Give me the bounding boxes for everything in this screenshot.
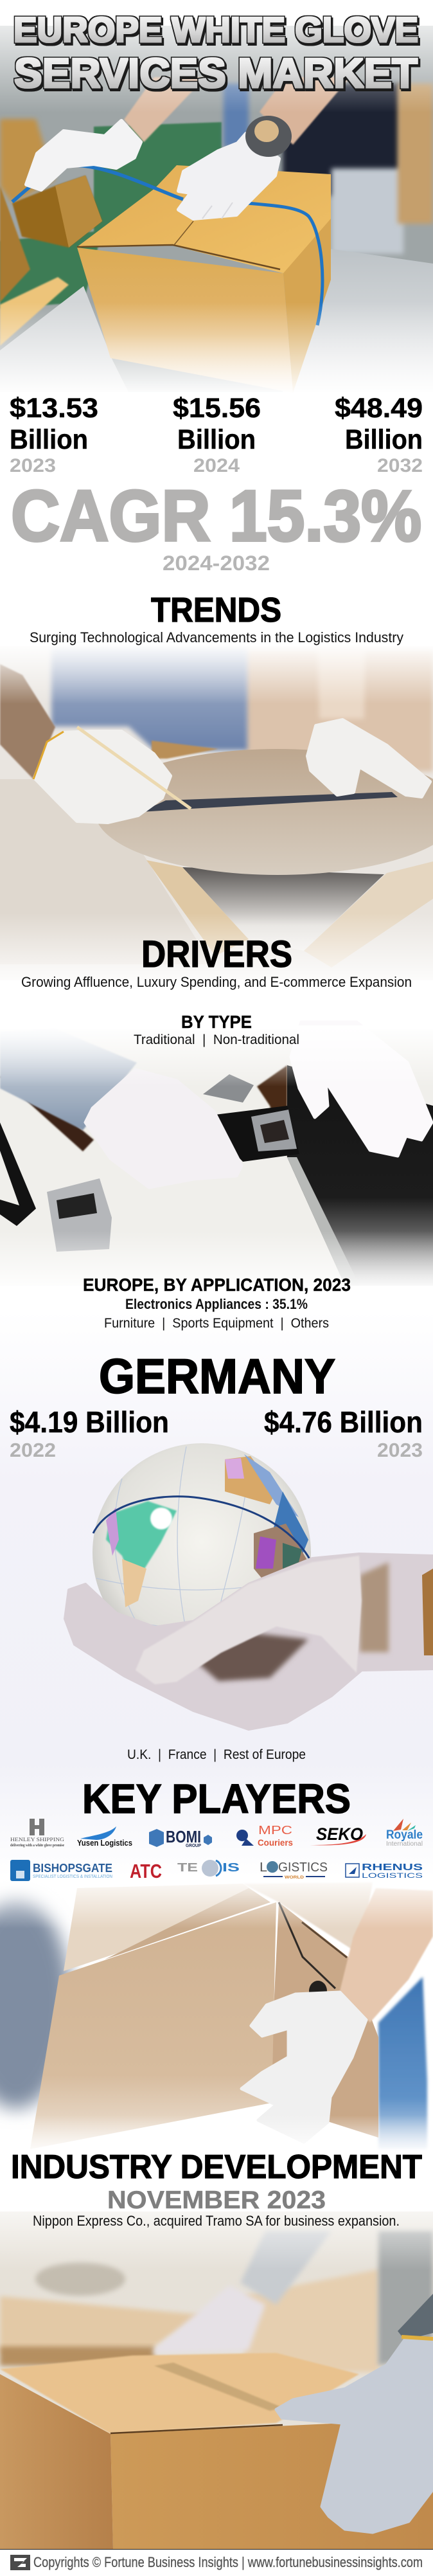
footer: [0, 2549, 433, 2576]
logo: Bishopsgate: BISHOPSGATE: [33, 1862, 112, 1875]
title: SERVICES MARKET: [14, 50, 418, 96]
by type heading: BY TYPE: [181, 1012, 252, 1032]
photo: gloved hands measuring with a ruler on a round table: [0, 646, 433, 980]
drivers text: Growing Affluence, Luxury Spending, and E-commerce Expansion: [21, 974, 412, 990]
photo fade: bottom: [0, 1231, 433, 1292]
germany 2022 value: $4.19 Billion: [10, 1405, 169, 1439]
logo: BOMI Group: GROUP: [186, 1844, 201, 1848]
logo: Tecois: IS: [222, 1861, 240, 1874]
title: [13, 10, 418, 96]
leading application share: Electronics Appliances : 35.1%: [125, 1296, 308, 1312]
title: EUROPE WHITE GLOVE: [13, 10, 418, 50]
heading: industry development: INDUSTRY DEVELOPMENT: [11, 2148, 422, 2186]
logo: Yusen Logistics: Yusen Logistics: [77, 1838, 132, 1848]
logo: MPC Couriers: [236, 1824, 293, 1848]
heading: trends: TRENDS: [151, 591, 281, 629]
logo: Logistics World: L: [260, 1860, 267, 1875]
logo: Royale International: Royale: [386, 1828, 423, 1842]
stat: 2024 market value: [173, 393, 261, 476]
photo fade: top: [0, 2186, 433, 2269]
heading: germany: GERMANY: [99, 1349, 335, 1404]
germany 2022 value: 2022: [10, 1439, 56, 1461]
photo fade: bottom: [0, 302, 433, 395]
logo: BOMI Group: [149, 1827, 212, 1848]
logo: Rhenus Logistics: LOGISTICS: [362, 1872, 423, 1880]
photo: gloved hands handling photographic film slides: [0, 1022, 433, 1286]
photo fade: top: [0, 1025, 433, 1086]
germany 2022 value: [10, 1405, 169, 1461]
other regions: U.K. | France | Rest of Europe: [127, 1747, 306, 1762]
development date: NOVEMBER 2023: [107, 2186, 326, 2214]
logo: Henley Shipping: [10, 1819, 64, 1848]
logo: MPC Couriers: MPC: [258, 1824, 292, 1837]
photo fade: bottom: [0, 2115, 433, 2157]
CAGR period: 2024-2032: [163, 552, 270, 575]
germany 2023 value: [264, 1405, 423, 1461]
heading: key players: KEY PLAYERS: [82, 1776, 351, 1822]
photo: gloved hand carrying a cardboard box: [0, 1882, 433, 2149]
logo: Rhenus Logistics: RHENUS: [362, 1862, 423, 1873]
stat: 2024 market value: Billion: [177, 424, 256, 455]
other applications: Furniture | Sports Equipment | Others: [104, 1316, 329, 1331]
stat: 2024 market value: $15.56: [173, 393, 261, 424]
logo: Logistics World: [260, 1860, 328, 1880]
stat: 2032 market value: $48.49: [335, 393, 423, 424]
germany 2023 value: 2023: [377, 1439, 423, 1461]
logo: MPC Couriers: Couriers: [258, 1837, 293, 1848]
logo: Royale International: [386, 1819, 423, 1848]
logo: Henley Shipping: HENLEY SHIPPING: [10, 1837, 64, 1842]
logo: ATC: ATC: [130, 1860, 162, 1882]
photo fade: bottom: [0, 913, 433, 990]
stat: 2023 market value: [10, 393, 98, 476]
photo: gloved hands strapping a cardboard box: [0, 26, 433, 393]
stat: 2032 market value: [335, 393, 423, 476]
development text: Nippon Express Co., acquired Tramo SA for business expansion.: [33, 2213, 400, 2229]
photo fade: top: [0, 0, 433, 113]
stat: 2023 market value: $13.53: [10, 393, 98, 424]
trends text: Surging Technological Advancements in the Logistics Industry: [30, 629, 403, 645]
logo: Henley Shipping: delivering with a white glove promise: [10, 1844, 64, 1848]
icon: brand logo: [10, 2555, 30, 2570]
heading: drivers: DRIVERS: [141, 933, 292, 975]
stat: 2023 market value: Billion: [10, 424, 88, 455]
logo: Bishopsgate: [10, 1860, 112, 1881]
logo: Rhenus Logistics: [346, 1862, 423, 1880]
stat: 2024 market value: 2024: [193, 455, 240, 476]
photo fade: top: [0, 1874, 433, 1929]
logo: Logistics World: GISTICS: [278, 1860, 328, 1875]
logo: Yusen Logistics: [77, 1826, 132, 1848]
logo: Bishopsgate: SPECIALIST LOGISTICS & INSTALLATION: [33, 1875, 112, 1879]
application heading: EUROPE, BY APPLICATION, 2023: [83, 1275, 351, 1295]
by type segments: Traditional | Non-traditional: [134, 1032, 299, 1047]
photo: gloved hands sealing a large cardboard box: [0, 2211, 433, 2549]
logo: BOMI Group: BOMI: [166, 1827, 201, 1846]
logo: SEKO: SEKO: [316, 1824, 363, 1844]
photo fade: top: [0, 643, 433, 704]
logo: Royale International: International: [386, 1841, 423, 1848]
stat: 2032 market value: Billion: [345, 424, 423, 455]
stat: 2032 market value: 2032: [377, 455, 423, 476]
logo: Tecois: TE: [177, 1861, 198, 1874]
photo: gloved hand holding a globe: [0, 1311, 433, 1877]
stat: 2023 market value: 2023: [10, 455, 56, 476]
logo: Tecois: [177, 1860, 240, 1877]
logo: Logistics World: WORLD: [285, 1876, 305, 1880]
germany 2023 value: $4.76 Billion: [264, 1405, 423, 1439]
